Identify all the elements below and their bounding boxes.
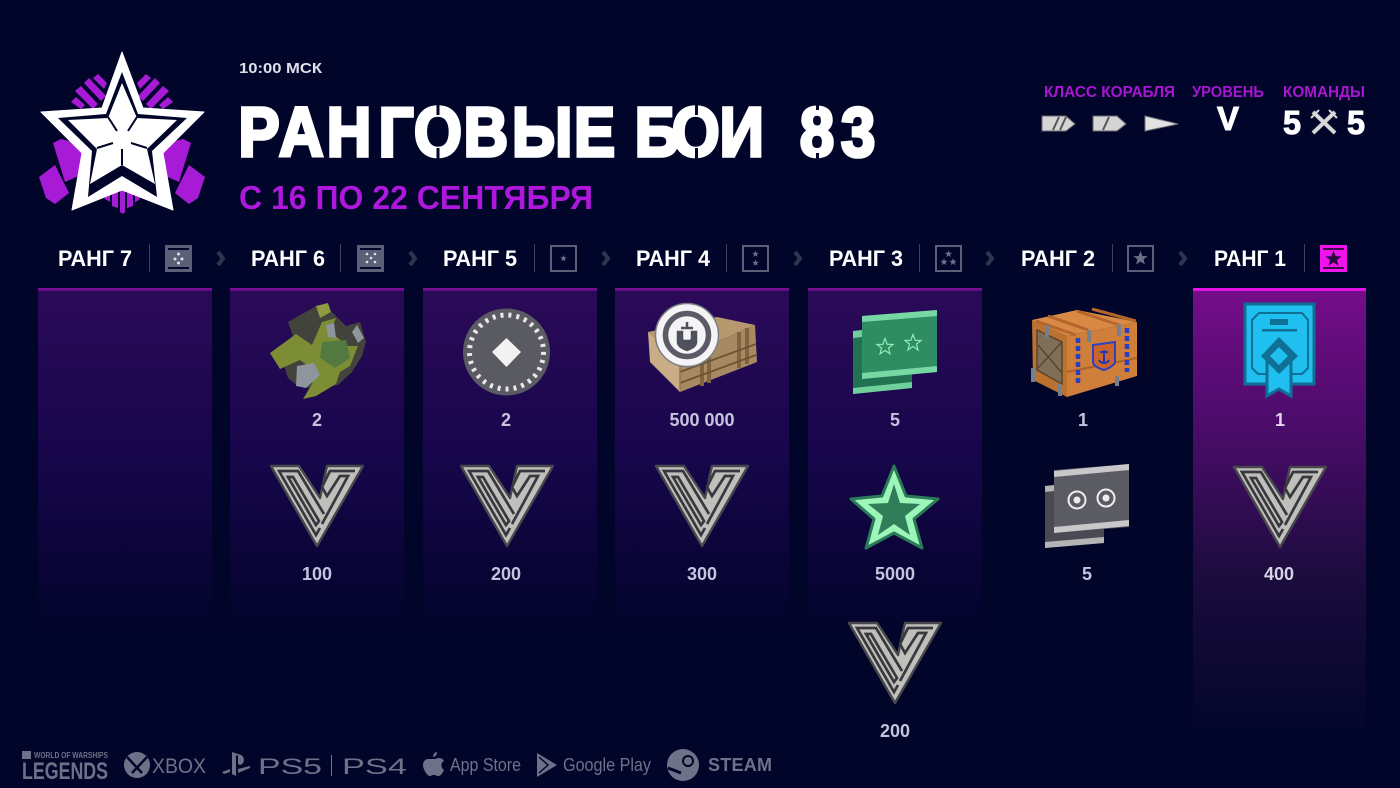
label: 200: 200 (491, 564, 521, 584)
logo: Google Play: Google Play (563, 755, 651, 775)
icon: green star (851, 466, 938, 548)
logo: Legends: WORLD OF WARSHIPS (34, 751, 109, 760)
label: signal count: 2 (501, 410, 511, 430)
rank 5 header (443, 244, 576, 272)
logo: App Store: App Store (450, 755, 521, 775)
arrows between ranks (218, 252, 1185, 265)
rank 4 header (636, 244, 768, 272)
logo: star emblem (39, 52, 205, 214)
icon: rank badge 100 (271, 466, 363, 546)
label: credits amount: 500 000 (669, 410, 735, 430)
logo: App Store (423, 752, 521, 776)
info: ship class (1042, 84, 1178, 131)
rank 2 header (1021, 244, 1153, 272)
rank 5 header: РАНГ 5 (443, 246, 517, 271)
icon: grey flags (1045, 464, 1129, 548)
rank 7 header: РАНГ 7 (58, 246, 132, 271)
rank 1 header (1214, 244, 1347, 272)
logo: Steam (667, 749, 772, 781)
logo: Google Play (537, 753, 651, 777)
logo: Legends: LEGENDS (22, 758, 108, 785)
logo: PlayStation 5 and 4 (222, 752, 407, 779)
label: grey flags count: 5 (1082, 564, 1092, 584)
panel: rank 4 (615, 288, 789, 640)
panel: rank 6 (230, 288, 404, 640)
footer: platform logos (22, 749, 772, 785)
label: 400: 400 (1264, 564, 1294, 584)
label: 300: 300 (687, 564, 717, 584)
icon: rank badge 200 lower (849, 623, 941, 703)
title: РАНГОВЫЕ БОИ 83 (238, 92, 875, 171)
label: certificate count: 1 (1275, 410, 1285, 430)
logo: Steam: STEAM (708, 755, 772, 775)
rank 3 header: РАНГ 3 (829, 246, 903, 271)
label: container count: 1 (1078, 410, 1088, 430)
rank header row (58, 244, 1347, 272)
logo: PlayStation 5 and 4: PS5 (258, 754, 322, 779)
logo: Xbox (124, 752, 206, 778)
rank 6 header (251, 244, 384, 272)
info: tier (1192, 84, 1264, 137)
panel: rank 1 (1193, 288, 1366, 743)
rank 4 header: РАНГ 4 (636, 246, 711, 271)
info: tier: УРОВЕНЬ (1192, 84, 1264, 101)
info: tier: V (1217, 100, 1239, 137)
icon: green flags (853, 310, 937, 394)
rank 6 header: РАНГ 6 (251, 246, 325, 271)
logo: PlayStation 5 and 4: PS4 (342, 754, 407, 779)
label: camouflage count: 2 (312, 410, 322, 430)
label: stars amount: 5000 (875, 564, 915, 584)
logo: Legends (22, 751, 109, 785)
info: teams 5 vs 5 (1283, 84, 1365, 141)
info: teams 5 vs 5: 5 (1283, 104, 1301, 141)
panel: rank 7 (38, 288, 212, 640)
info: ship class: КЛАСС КОРАБЛЯ (1044, 84, 1175, 101)
icon: camouflage (270, 303, 366, 399)
logo: Xbox: XBOX (152, 755, 206, 778)
panel: rank 5 (423, 288, 597, 640)
label: flags count: 5 (890, 410, 900, 430)
rank 2 header: РАНГ 2 (1021, 246, 1095, 271)
rank 3 header (829, 244, 961, 272)
panel: rank 3 (808, 288, 982, 640)
time label: 10:00 МСК (239, 60, 323, 77)
icon: rank badge 200 (461, 466, 553, 546)
icon: blue certificate (1245, 304, 1314, 396)
info: teams 5 vs 5: 5 (1347, 104, 1365, 141)
icon: rank badge 400 (1234, 467, 1326, 547)
icon: signal coin (463, 308, 550, 396)
icon: orange container (1032, 309, 1137, 397)
label: lower 200: 200 (880, 721, 910, 741)
icon: rank badge 300 (656, 466, 748, 546)
icon: credits crate (648, 304, 757, 392)
subtitle: dates: С 16 ПО 22 СЕНТЯБРЯ (239, 179, 593, 216)
rank 1 header: РАНГ 1 (1214, 246, 1286, 271)
info: teams 5 vs 5: КОМАНДЫ (1283, 84, 1365, 101)
label: 100: 100 (302, 564, 332, 584)
rank 7 header (58, 244, 192, 272)
